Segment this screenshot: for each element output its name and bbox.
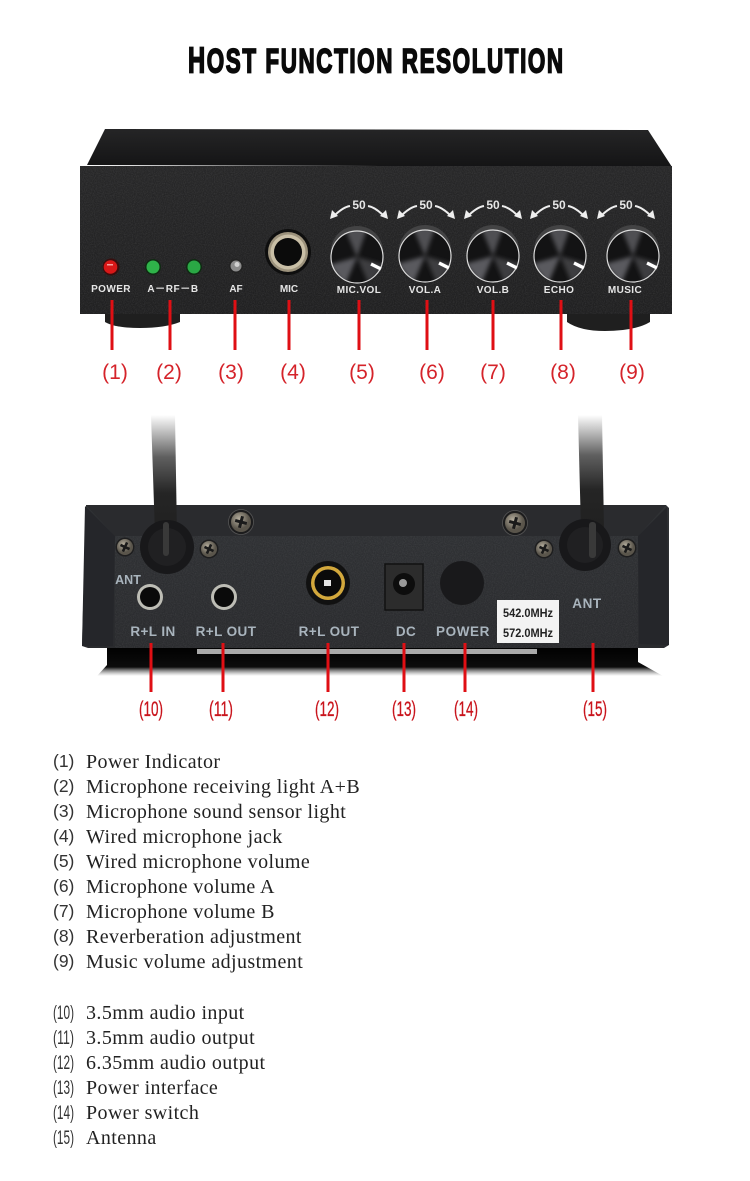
panel: front view of host [80,129,672,384]
front callout numbers [102,361,645,384]
front panel printed labels: A－RF－B [147,284,199,295]
legend numbers 10 to 15: (15) [53,1128,74,1149]
rear callout lines [151,643,593,692]
frequency label: 542.0MHz [503,606,553,620]
front callout numbers: (2) [156,361,182,384]
rear callout numbers: (10) [139,698,163,721]
rear panel printed labels: R+L OUT [299,624,360,639]
front callout numbers: (1) [102,361,128,384]
front callout numbers: (6) [419,361,445,384]
rear panel printed labels: R+L OUT [196,624,257,639]
power button [440,561,484,605]
front panel printed labels: 50 [552,198,566,212]
rear screws [116,510,636,558]
legend text 1 to 9: Reverberation adjustment [86,926,302,948]
left antenna [140,415,194,574]
rear callout numbers: (12) [315,698,339,721]
legend numbers 1 to 9: (9) [53,951,74,971]
front callout numbers: (9) [619,361,645,384]
legend numbers 1 to 9: (7) [53,901,74,921]
indicator: power led [102,258,120,276]
front callout numbers: (5) [349,361,375,384]
rear panel printed labels: POWER [436,624,490,639]
legend text 1 to 9: Microphone receiving light A+B [86,776,360,798]
legend text 1 to 9: Microphone volume B [86,901,275,923]
rear callout numbers: (15) [583,698,607,721]
front panel printed labels: 50 [486,198,500,212]
rear top bezel [86,505,666,536]
rear panel printed labels: DC [396,624,416,639]
front panel printed labels: MUSIC [608,285,642,296]
legend text 10 to 15: 6.35mm audio output [86,1052,265,1074]
legend text 10 to 15: Power interface [86,1077,218,1099]
front top cover [87,129,672,167]
frequency label [497,600,559,643]
frequency label: 572.0MHz [503,626,553,640]
front callout numbers: (8) [550,361,576,384]
infographic canvas [54,46,672,1148]
front callout lines [112,300,631,350]
indicators: rf leds [145,259,202,275]
rear panel printed labels: ANT [115,573,141,587]
front faceplate [80,166,672,314]
legend numbers 1 to 9 [53,751,74,971]
front panel printed labels [91,198,642,296]
title: HOST FUNCTION RESOLUTION [188,41,565,81]
front panel printed labels: MIC.VOL [337,285,381,296]
knobs and level arcs [329,206,661,285]
rear side bezels [82,506,669,646]
legend text 10 to 15: 3.5mm audio input [86,1002,245,1024]
legend text 1 to 9: Microphone volume A [86,876,275,898]
6.35mm gold jack [306,561,350,605]
front panel printed labels: VOL.B [477,285,509,296]
front panel printed labels: VOL.A [409,285,441,296]
front panel printed labels: 50 [352,198,366,212]
front panel printed labels: ECHO [544,285,574,296]
legend numbers 10 to 15: (12) [53,1053,74,1074]
rear callout numbers [139,698,607,721]
panel: rear view of host [82,415,669,721]
dc power socket [385,564,423,610]
legend text 1 to 9: Wired microphone jack [86,826,283,848]
rear floor shadow and feet [97,646,663,676]
legend text 1 to 9: Microphone sound sensor light [86,801,346,823]
3.5mm jacks [137,584,237,610]
rear panel printed labels [115,573,602,639]
front panel printed labels: 50 [419,198,433,212]
legend text 1 to 9: Power Indicator [86,751,220,773]
legend numbers 1 to 9: (6) [53,876,74,896]
indicator: af led [229,259,243,273]
legend numbers 10 to 15: (13) [53,1078,74,1099]
legend text 10 to 15: 3.5mm audio output [86,1027,255,1049]
legend numbers 1 to 9: (2) [53,776,74,796]
rear callout numbers: (13) [392,698,416,721]
legend numbers 10 to 15: (11) [53,1028,74,1049]
rear callout numbers: (14) [454,698,478,721]
rear body [82,505,669,648]
front panel printed labels: 50 [619,198,633,212]
legend text 1 to 9 [86,751,360,973]
legend numbers 1 to 9: (8) [53,926,74,946]
legend numbers 1 to 9: (1) [53,751,74,771]
legend: rear functions [53,1002,265,1149]
front panel printed labels: AF [229,284,243,295]
rear callout numbers: (11) [209,698,233,721]
front panel printed labels: MIC [280,284,298,295]
legend numbers 10 to 15: (14) [53,1103,74,1124]
front callout numbers: (4) [280,361,306,384]
rear panel printed labels: R+L IN [130,624,176,639]
microphone jack [265,229,311,275]
legend numbers 10 to 15 [53,1003,74,1149]
legend text 1 to 9: Wired microphone volume [86,851,310,873]
legend text 1 to 9: Music volume adjustment [86,951,303,973]
legend: front functions [53,751,360,973]
rear panel printed labels: ANT [572,596,602,611]
front callout numbers: (7) [480,361,506,384]
legend text 10 to 15: Antenna [86,1127,157,1149]
legend text 10 to 15 [86,1002,265,1149]
right antenna [559,415,611,571]
front rubber feet [105,312,650,331]
legend text 10 to 15: Power switch [86,1102,199,1124]
front callout numbers: (3) [218,361,244,384]
legend numbers 1 to 9: (3) [53,801,74,821]
legend numbers 1 to 9: (5) [53,851,74,871]
legend numbers 10 to 15: (10) [53,1003,74,1024]
legend numbers 1 to 9: (4) [53,826,74,846]
front panel printed labels: POWER [91,284,131,295]
